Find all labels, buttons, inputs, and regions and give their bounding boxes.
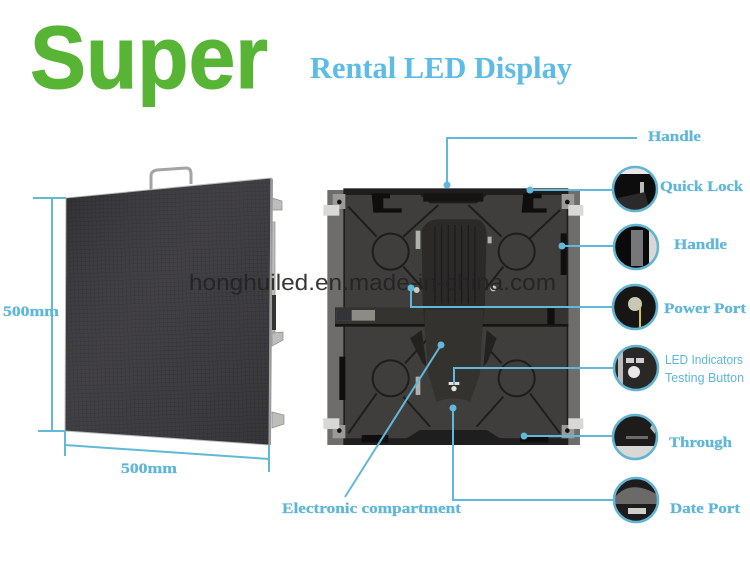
side brackets — [271, 198, 284, 428]
thumbnail: LED indicators — [615, 347, 657, 389]
watermark: honghuiled.en.made-in-china.com — [189, 270, 556, 295]
title: Super: Super — [30, 7, 268, 107]
front view of LED panel — [65, 168, 284, 445]
side wings — [410, 330, 497, 367]
callout: side handle — [558, 224, 727, 270]
callout: side handle: Handle — [674, 237, 727, 253]
outer frame — [327, 190, 580, 445]
struts and hubs — [348, 205, 560, 433]
subtitle: Rental LED Display: Rental LED Display — [310, 50, 572, 85]
carrying handle — [151, 168, 191, 190]
callout: top handle — [444, 129, 701, 188]
top handle slot — [423, 193, 483, 202]
centre rail — [335, 307, 568, 327]
dimension: width 500mm: 500mm — [121, 461, 178, 477]
indicator cluster — [449, 382, 459, 391]
corner brackets — [323, 194, 583, 438]
thumbnail: side handle — [615, 226, 657, 268]
callout: date port — [450, 404, 740, 524]
callout: through — [520, 414, 733, 460]
callout: LED indicators and testing button: Testing Button — [665, 371, 744, 385]
LED face — [65, 178, 271, 445]
rear view of LED panel — [323, 188, 583, 445]
callout: power port: Power Port — [664, 301, 746, 317]
callout: top handle: Handle — [648, 129, 701, 145]
dimension: height 500mm: 500mm — [3, 304, 60, 320]
quick locks — [362, 193, 548, 442]
thumbnail: quick lock — [614, 168, 656, 210]
callout: quick lock — [526, 166, 744, 212]
callout: power port — [408, 284, 746, 330]
dimension: width 500mm — [65, 431, 269, 477]
callout: date port: Date Port — [670, 501, 740, 517]
dimension: height 500mm — [3, 198, 66, 431]
callout: LED indicators and testing button — [454, 346, 744, 392]
power connector — [337, 285, 496, 321]
electronics compartment — [422, 219, 487, 402]
thumbnail: date port — [615, 479, 657, 521]
side handles — [339, 233, 567, 400]
cabinet body — [343, 188, 568, 445]
callout: electronic compartment: Electronic compartment — [282, 501, 461, 517]
thumbnail: power port — [614, 286, 656, 328]
thumbnail: through — [614, 416, 656, 458]
callout: electronic compartment — [282, 342, 461, 517]
callout: LED indicators and testing button: LED Indicators — [665, 353, 743, 367]
callout: quick lock: Quick Lock — [660, 179, 744, 195]
latches — [416, 231, 492, 395]
callout: through: Through — [669, 435, 733, 451]
